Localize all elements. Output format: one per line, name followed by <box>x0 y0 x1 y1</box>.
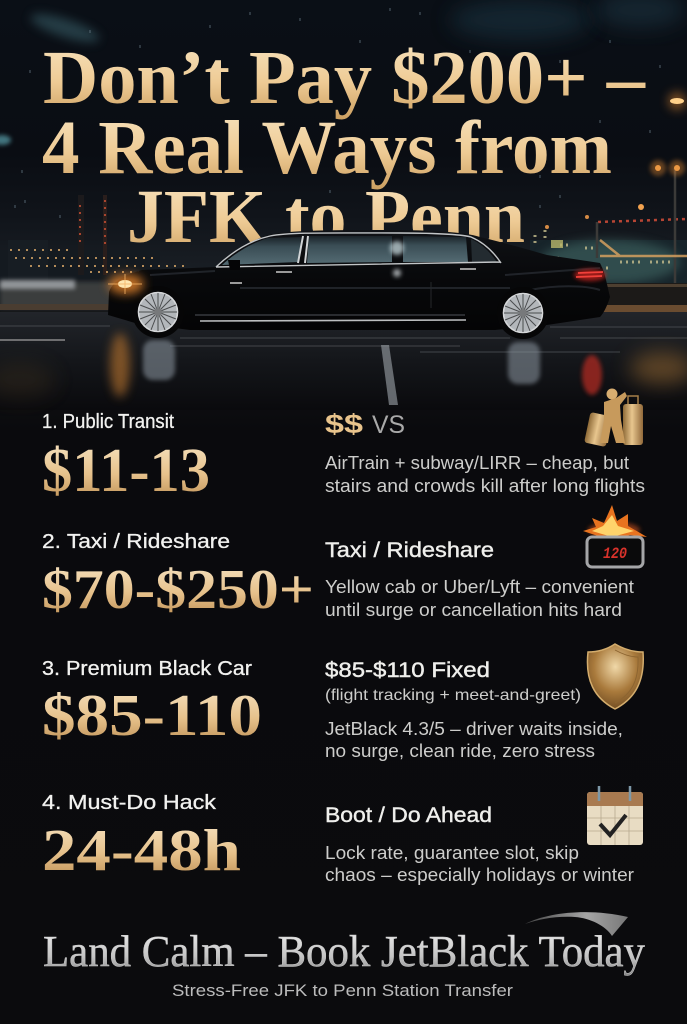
price: $11-13 <box>42 437 210 505</box>
front wheel <box>132 286 184 338</box>
description: Lock rate, guarantee slot, skip <box>325 843 579 863</box>
row 4: must-do hack: chaos – especially holidays or winter <box>325 865 634 885</box>
price: $70-$250+ <box>42 559 314 621</box>
icon: surge meter in flames <box>583 505 647 567</box>
label: 1. Public Transit <box>42 411 174 433</box>
icon: gold shield <box>587 644 643 709</box>
note: (flight tracking + meet-and-greet) <box>325 687 581 704</box>
heading: Taxi / Rideshare <box>325 539 494 562</box>
body highlights <box>150 268 600 290</box>
tagline: Stress-Free JFK to Penn Station Transfer <box>172 981 513 1000</box>
rear wheel <box>497 287 549 339</box>
label: 4. Must-Do Hack <box>42 792 217 814</box>
heading: $85-$110 Fixed <box>325 659 490 682</box>
heading: Boot / Do Ahead <box>325 804 492 827</box>
description: JetBlack 4.3/5 – driver waits inside, <box>325 719 623 739</box>
icon: surge meter in flames: 120 <box>603 545 627 563</box>
windows <box>216 233 501 270</box>
night sky and city backdrop <box>0 0 687 290</box>
swoosh logo <box>525 912 628 936</box>
icon: calendar with check <box>587 786 643 845</box>
label: 3. Premium Black Car <box>42 658 252 680</box>
title: Don’t Pay $200+ – <box>43 36 646 120</box>
footer call to action <box>43 912 645 1000</box>
heading: $$ <box>325 409 363 439</box>
description: AirTrain + subway/LIRR – cheap, but <box>325 453 629 473</box>
title: 4 Real Ways from <box>42 106 612 190</box>
description: Yellow cab or Uber/Lyft – convenient <box>325 577 634 597</box>
row 3: premium black car: no surge, clean ride, zero stress <box>325 741 595 761</box>
row 1: public transit <box>42 409 645 505</box>
car body <box>108 230 610 330</box>
headlight glow <box>108 274 144 294</box>
price: $85-110 <box>42 682 262 748</box>
title <box>42 36 646 259</box>
row 1: public transit: VS <box>372 411 405 439</box>
wet road and barriers <box>0 280 687 410</box>
row 3: premium black car <box>42 658 623 761</box>
limousine <box>108 230 610 339</box>
headline: Land Calm – Book JetBlack Today <box>43 927 645 976</box>
tail light <box>574 269 606 281</box>
row 2: taxi / rideshare: until surge or cancellation hits hard <box>325 600 622 620</box>
label: 2. Taxi / Rideshare <box>42 531 230 553</box>
price: 24-48h <box>42 817 241 883</box>
row 1: public transit: stairs and crowds kill after long flights <box>325 476 645 496</box>
icon: traveller with luggage <box>584 388 643 447</box>
title: JFK to Penn <box>127 175 525 259</box>
row 2: taxi / rideshare <box>42 531 634 621</box>
side trim <box>200 320 466 321</box>
row 4: must-do hack <box>42 792 634 885</box>
